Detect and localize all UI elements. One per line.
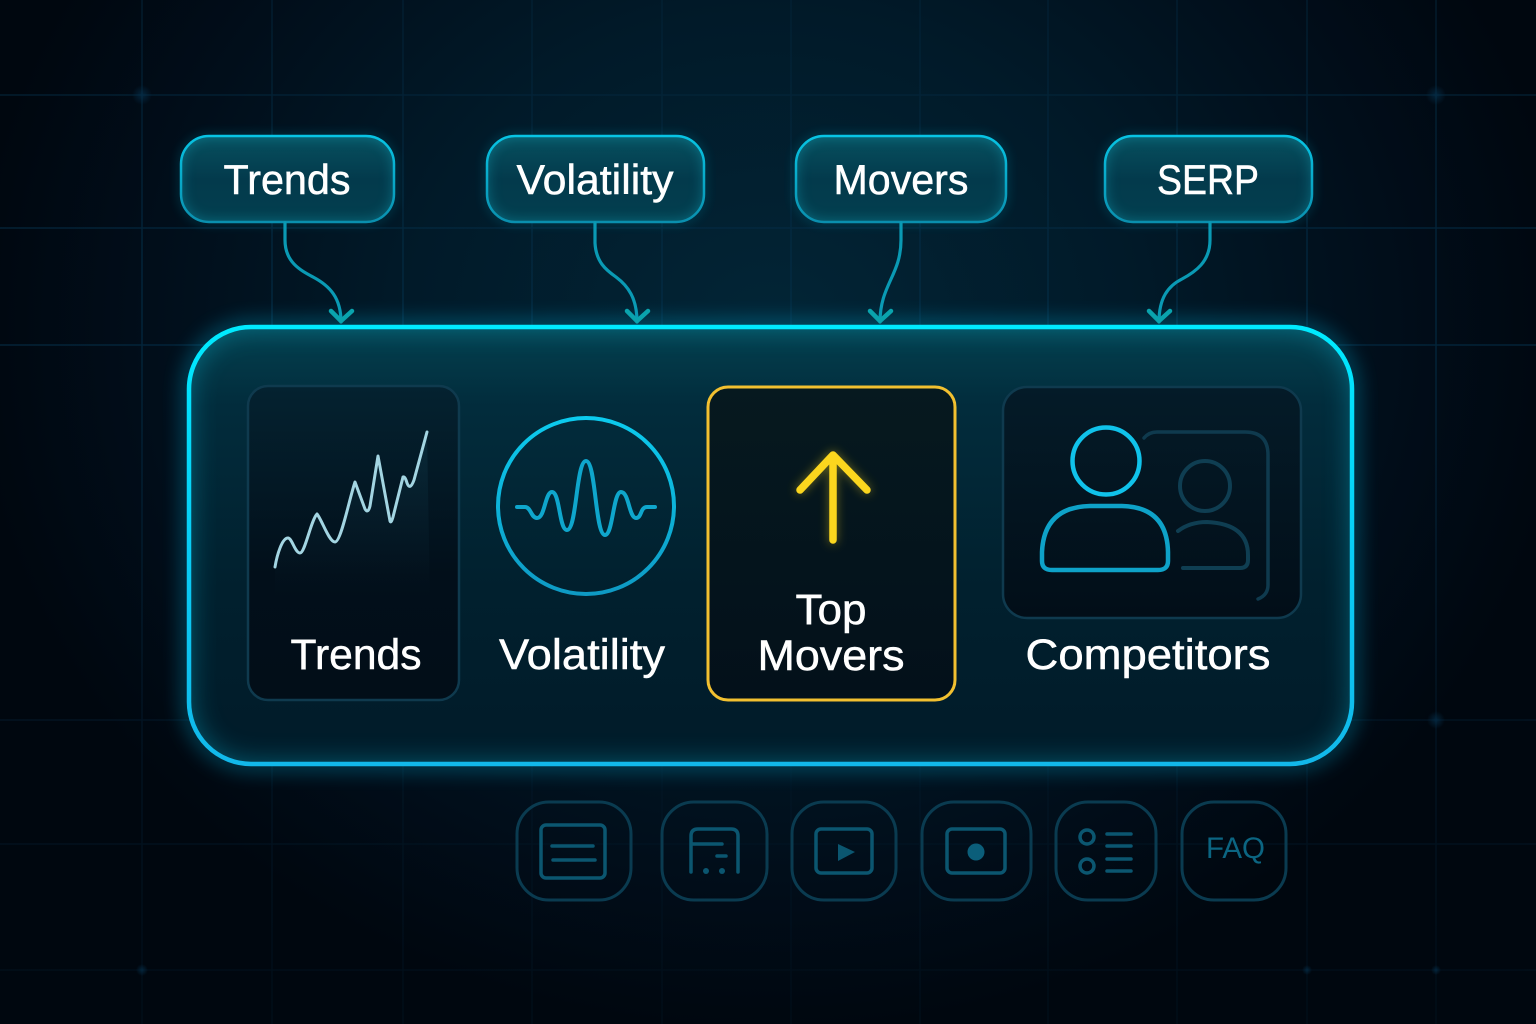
label: top movers: Movers — [758, 632, 904, 680]
arrow: movers to panel — [870, 223, 901, 322]
tag: serp: SERP — [1157, 156, 1259, 203]
icon: media — [922, 802, 1031, 900]
icon: article — [517, 802, 631, 900]
icon: faq: FAQ — [1206, 832, 1265, 865]
icon: competitor people — [1042, 428, 1268, 599]
arrow: serp to panel — [1149, 223, 1210, 322]
icon: up arrow — [800, 455, 867, 540]
card: trends — [248, 386, 459, 700]
icon row: serp features — [517, 802, 1286, 900]
icon: faq — [1182, 802, 1286, 900]
tag: trends: Trends — [224, 156, 350, 203]
icon: video — [792, 802, 896, 900]
card: top movers — [708, 387, 955, 700]
icon: volatility wave — [498, 418, 674, 594]
tag: movers: Movers — [834, 156, 968, 203]
label: top movers: Top — [796, 586, 866, 634]
card: volatility — [498, 418, 674, 679]
tag: volatility: Volatility — [516, 156, 674, 203]
tag: trends — [181, 136, 394, 222]
card: competitors — [1003, 387, 1301, 679]
icon: trend line — [275, 432, 427, 567]
icon: list — [1056, 802, 1156, 900]
panel: main dashboard — [189, 327, 1352, 764]
tag: movers — [796, 136, 1006, 222]
tag: serp — [1105, 136, 1312, 222]
arrow: volatility to panel — [595, 223, 648, 322]
tag: volatility — [487, 136, 704, 222]
label: trends: Trends — [290, 631, 422, 679]
label: volatility: Volatility — [499, 631, 666, 679]
arrow: trends to panel — [285, 223, 352, 322]
icon: shopping — [662, 802, 767, 900]
label: competitors: Competitors — [1026, 631, 1270, 679]
